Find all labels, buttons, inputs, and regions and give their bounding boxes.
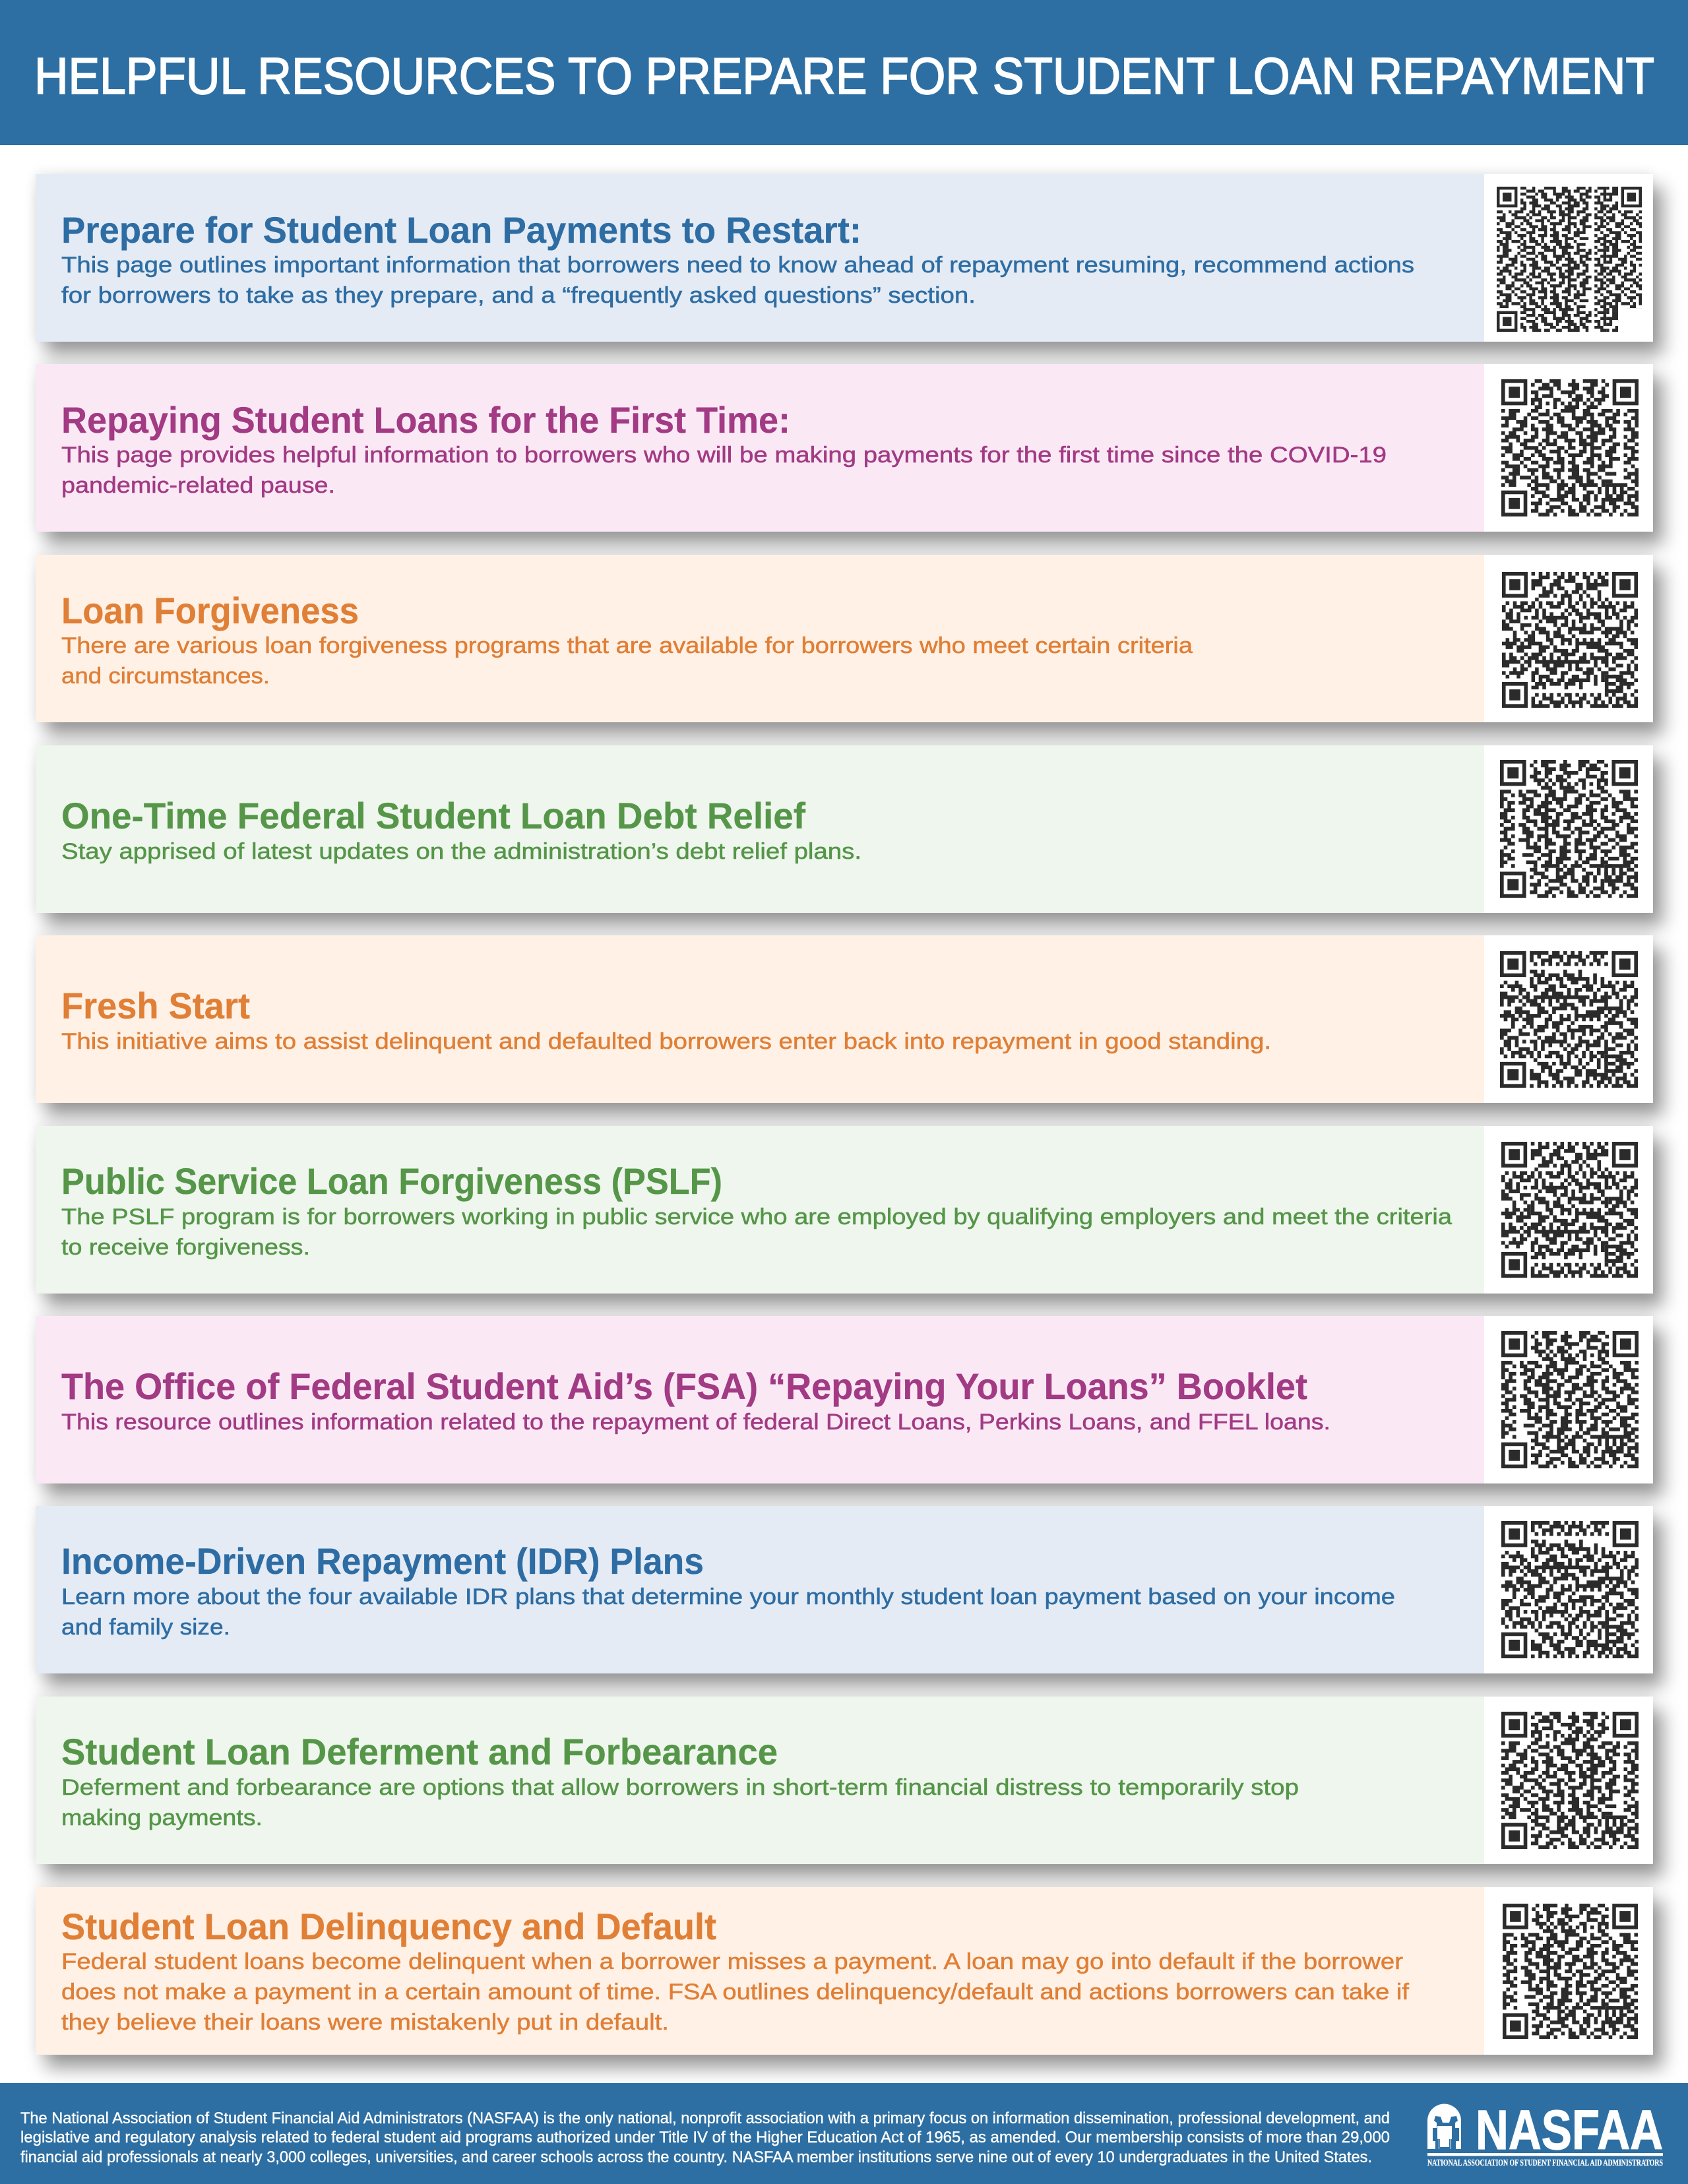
description: This page provides helpful information to borrowers who will be making payments for the first time since the COVID-19 xyxy=(61,443,1387,468)
footer banner xyxy=(0,2083,1688,2184)
heading: Income-Driven Repayment (IDR) Plans xyxy=(61,1540,704,1582)
panel text xyxy=(61,1540,1395,1640)
description xyxy=(61,1949,1410,2035)
header banner xyxy=(0,0,1688,145)
description: The PSLF program is for borrowers working in public service who are employed by qualifying employers and meet the criteria xyxy=(61,1204,1452,1230)
heading: Fresh Start xyxy=(61,985,250,1026)
panel text xyxy=(61,1906,1410,2035)
description: and circumstances. xyxy=(61,664,270,689)
heading: Public Service Loan Forgiveness (PSLF) xyxy=(61,1160,722,1202)
QR background xyxy=(1484,1316,1653,1483)
panel text xyxy=(61,1731,1299,1830)
panel: Repaying Student Loans for the First Time xyxy=(36,364,1653,532)
footer text: The National Association of Student Financial Aid Administrators (NASFAA) is the only national, nonprofit association with a primary focus on information dissemination, professional development, and xyxy=(20,2109,1390,2127)
description: does not make a payment in a certain amount of time. FSA outlines delinquency/default and actions borrowers can take if xyxy=(61,1980,1410,2005)
QR code xyxy=(1501,1521,1639,1658)
panel: Student Loan Deferment and Forbearance xyxy=(36,1697,1653,1864)
description xyxy=(61,443,1387,498)
description: Federal student loans become delinquent when a borrower misses a payment. A loan may go into default if the borrower xyxy=(61,1949,1403,1974)
QR background xyxy=(1484,174,1653,342)
description: This initiative aims to assist delinquent and defaulted borrowers enter back into repayment in good standing. xyxy=(61,1029,1271,1054)
heading: Loan Forgiveness xyxy=(61,590,359,631)
description: There are various loan forgiveness programs that are available for borrowers who meet certain criteria xyxy=(61,633,1193,658)
QR code xyxy=(1501,379,1639,516)
panel: Loan Forgiveness xyxy=(36,555,1653,722)
description xyxy=(61,1584,1395,1640)
footer text: legislative and regulatory analysis related to federal student aid programs authorized under Title IV of the Higher Education Act of 1965, as amended. Our membership consists of more than 29,000 xyxy=(20,2129,1390,2146)
description: Stay apprised of latest updates on the administration’s debt relief plans. xyxy=(61,839,861,864)
panel: One-Time Federal Student Loan Debt Relief xyxy=(36,745,1653,913)
description: This page outlines important information that borrowers need to know ahead of repayment resuming, recommend actions xyxy=(61,253,1414,278)
NASFAA logo xyxy=(1427,2103,1663,2168)
panel text xyxy=(61,985,1271,1054)
description: pandemic-related pause. xyxy=(61,473,335,498)
description: Learn more about the four available IDR plans that determine your monthly student loan payment based on your income xyxy=(61,1584,1395,1609)
QR code xyxy=(1503,1904,1638,2039)
QR background xyxy=(1484,935,1653,1103)
panel text xyxy=(61,590,1193,689)
panel text xyxy=(61,209,1414,308)
QR background xyxy=(1484,364,1653,532)
QR code xyxy=(1501,1142,1638,1278)
heading: Student Loan Deferment and Forbearance xyxy=(61,1731,778,1772)
panel: Prepare for Student Loan Payments to Restart xyxy=(36,174,1653,342)
description xyxy=(61,1204,1452,1260)
description: Deferment and forbearance are options that allow borrowers in short-term financial distress to temporarily stop xyxy=(61,1775,1299,1800)
heading: The Office of Federal Student Aid’s (FSA) “Repaying Your Loans” Booklet xyxy=(61,1365,1307,1407)
panel text xyxy=(61,795,861,864)
QR background xyxy=(1484,1126,1653,1294)
description xyxy=(61,253,1414,308)
description: This resource outlines information related to the repayment of federal Direct Loans, Perkins Loans, and FFEL loans. xyxy=(61,1410,1330,1435)
footer text: financial aid professionals at nearly 3,000 colleges, universities, and career schools across the country. NASFAA member institutions serve nine out of every 10 undergraduates in the United States. xyxy=(20,2148,1372,2166)
panel: Income-Driven Repayment (IDR) Plans xyxy=(36,1506,1653,1673)
QR code xyxy=(1501,1331,1639,1468)
logo rule xyxy=(1427,2153,1663,2156)
panel text xyxy=(61,399,1387,498)
QR background xyxy=(1484,555,1653,722)
heading: Prepare for Student Loan Payments to Restart: xyxy=(61,209,861,251)
QR background xyxy=(1484,1506,1653,1673)
panel: Public Service Loan Forgiveness (PSLF) xyxy=(36,1126,1653,1294)
QR code xyxy=(1500,760,1638,898)
QR background xyxy=(1484,745,1653,913)
description: making payments. xyxy=(61,1805,263,1830)
panel text xyxy=(61,1365,1330,1435)
heading: One-Time Federal Student Loan Debt Relief xyxy=(61,795,805,836)
QR code xyxy=(1500,951,1638,1088)
QR code xyxy=(1502,572,1638,708)
panel: FSA Repaying Your Loans Booklet xyxy=(36,1316,1653,1483)
description: to receive forgiveness. xyxy=(61,1235,310,1260)
panel: Student Loan Delinquency and Default xyxy=(36,1887,1653,2055)
panel text xyxy=(61,1160,1453,1260)
QR background xyxy=(1484,1697,1653,1864)
footer text xyxy=(20,2109,1390,2166)
description: for borrowers to take as they prepare, and a “frequently asked questions” section. xyxy=(61,283,976,308)
QR code xyxy=(1497,187,1642,332)
description: they believe their loans were mistakenly put in default. xyxy=(61,2010,669,2035)
QR background xyxy=(1484,1887,1653,2055)
description: and family size. xyxy=(61,1615,230,1640)
description xyxy=(61,1775,1299,1830)
heading: Student Loan Delinquency and Default xyxy=(61,1906,716,1947)
panel: Fresh Start xyxy=(36,935,1653,1103)
logo icon: arch with figure xyxy=(1427,2104,1461,2149)
description xyxy=(61,633,1193,689)
QR code xyxy=(1501,1712,1639,1849)
heading: Repaying Student Loans for the First Time: xyxy=(61,399,790,441)
